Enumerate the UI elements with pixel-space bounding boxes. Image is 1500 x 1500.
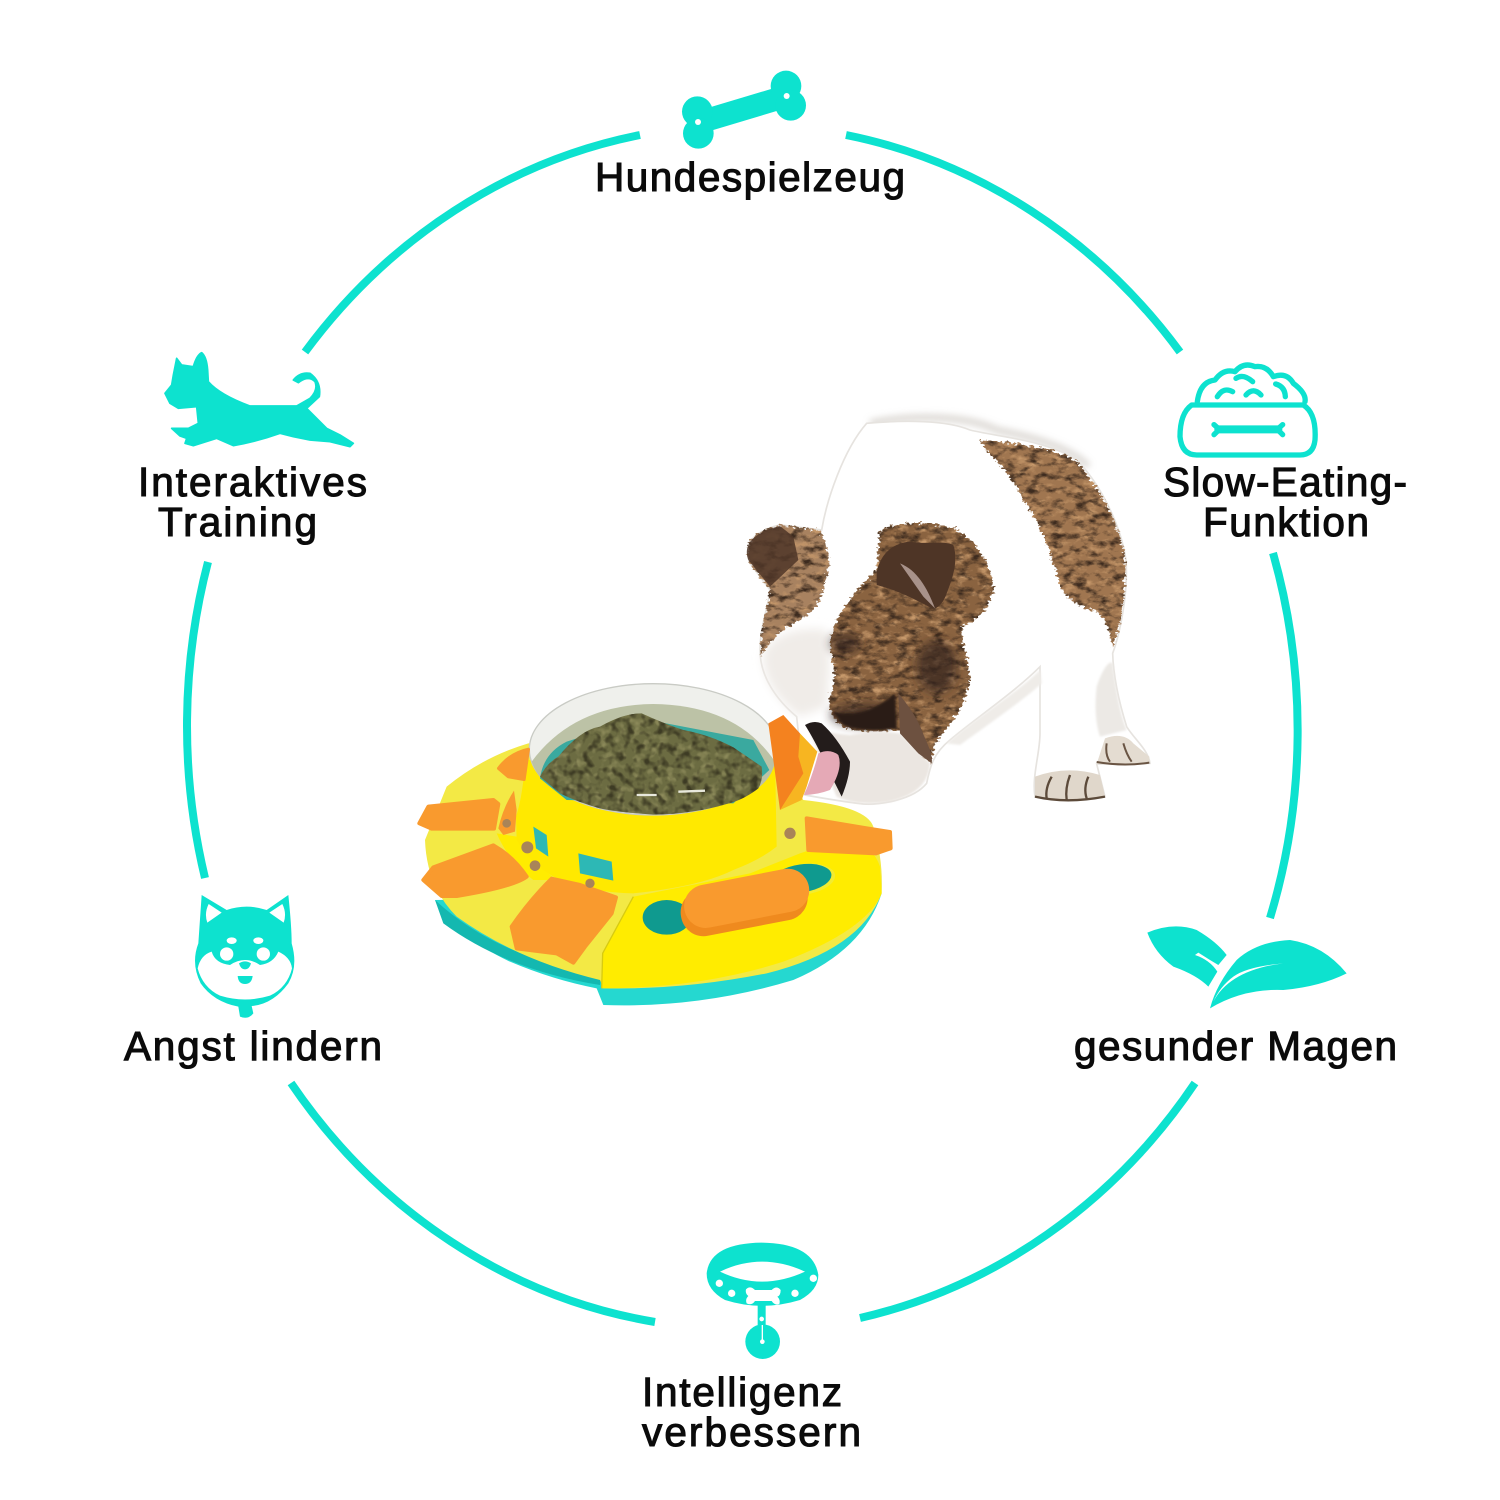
heading: Slow-Eating-Funktion xyxy=(1163,459,1407,545)
icon: leaves xyxy=(1147,926,1347,1008)
heading: Slow-Eating-Funktion: Slow-Eating- xyxy=(1163,459,1407,505)
toy: treats xyxy=(502,819,796,888)
toy: left side pillar xyxy=(498,791,517,835)
toy: standing flap xyxy=(780,733,817,810)
icon: food bowl xyxy=(1180,365,1315,455)
heading: Intelligenz verbessern: Intelligenz xyxy=(642,1369,842,1415)
toy: water tone xyxy=(532,704,775,815)
dog: eye shadow xyxy=(833,693,897,730)
toy: flap right xyxy=(807,818,891,853)
dog: neck shade xyxy=(947,670,1042,745)
toy: bowl body xyxy=(516,757,777,893)
heading: Hundespielzeug: Hundespielzeug xyxy=(595,154,905,200)
ring: segmented teal circle xyxy=(187,135,1298,1322)
dog: head brindle patch xyxy=(829,523,993,763)
heading: Intelligenz verbessern: verbessern xyxy=(642,1409,861,1455)
heading: gesunder Magen: gesunder Magen xyxy=(1074,1023,1397,1069)
toy: pale yellow disc xyxy=(425,733,882,988)
dog: far ear patch xyxy=(748,525,829,657)
icon: collar xyxy=(707,1243,818,1359)
dog: far ear dark xyxy=(747,526,798,587)
toy: teal wells xyxy=(643,900,691,935)
toy: glass dome xyxy=(529,684,777,815)
dog: back brindle patch xyxy=(978,440,1125,648)
heading: Interaktives Training: Training xyxy=(158,499,317,545)
toy: glass glints xyxy=(637,791,705,795)
heading: Intelligenz verbessern xyxy=(642,1369,861,1455)
photo: puzzle feeder toy xyxy=(419,684,891,1005)
icon: bone xyxy=(682,71,806,149)
toy: flap lower left xyxy=(423,845,527,896)
toy: front seam xyxy=(602,897,633,988)
dog: nose xyxy=(805,722,850,797)
toy: kibble xyxy=(540,713,762,815)
icon: shiba face xyxy=(195,895,294,1018)
dog: face shade xyxy=(763,629,830,717)
dog: jowl xyxy=(898,693,932,763)
dog: near ear xyxy=(877,542,955,609)
dog: tongue xyxy=(804,751,840,795)
heading: Slow-Eating-Funktion: Funktion xyxy=(1203,499,1369,545)
dog: head dark blobs xyxy=(830,633,957,727)
toy: flap left xyxy=(419,800,498,829)
dog: hind leg shade xyxy=(1096,663,1127,737)
toy: bright yellow segment xyxy=(602,837,882,988)
dog: muzzle xyxy=(808,728,930,803)
toy: back flap xyxy=(499,749,528,779)
heading: Interaktives Training: Interaktives xyxy=(138,459,367,505)
heading: Interaktives Training xyxy=(138,459,367,545)
toy: bright inner ring xyxy=(497,833,557,880)
toy: slider lower xyxy=(677,870,812,940)
heading: Angst lindern: Angst lindern xyxy=(124,1023,382,1069)
dog: rear paw xyxy=(1097,736,1149,765)
toy: teal base xyxy=(435,893,882,1005)
photo: bulldog xyxy=(747,418,1150,804)
toy: windows xyxy=(533,827,548,857)
dog: front paw xyxy=(1035,770,1105,801)
toy: flap front xyxy=(512,879,616,963)
toy: slider top xyxy=(680,865,813,932)
icon: running dog xyxy=(165,353,353,447)
